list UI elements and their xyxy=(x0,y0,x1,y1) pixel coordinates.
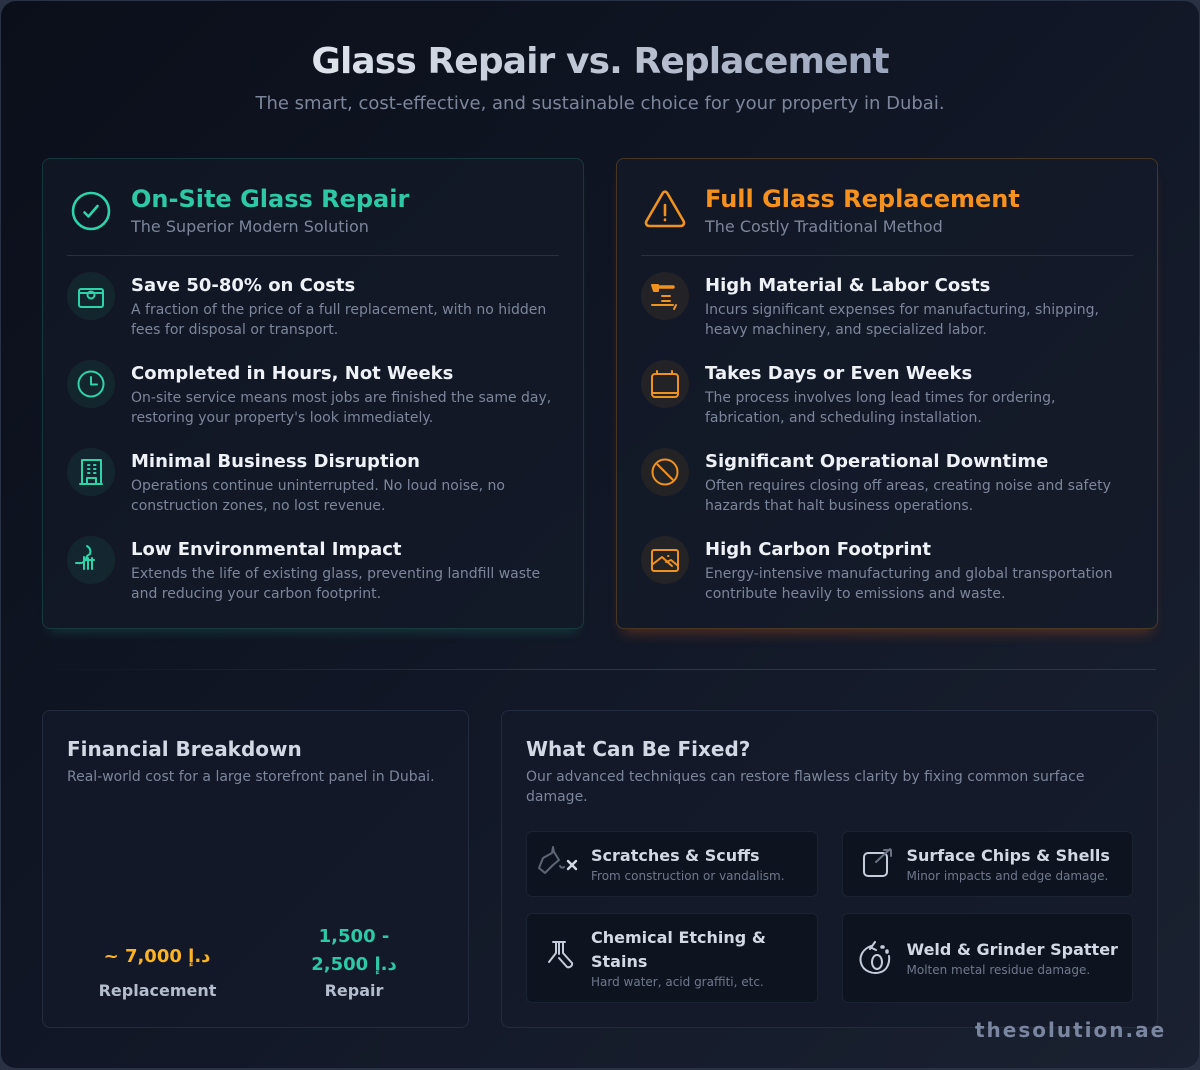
description: Minor impacts and edge damage. xyxy=(906,869,1108,883)
panel: financial breakdown xyxy=(42,710,469,1028)
description: damage. xyxy=(526,789,588,805)
card: scratches xyxy=(526,831,818,897)
description: Molten metal residue damage. xyxy=(906,963,1090,977)
description: Our advanced techniques can restore flawless clarity by fixing common surface xyxy=(526,769,1084,785)
item: save costs xyxy=(67,272,546,338)
icon: landscape image xyxy=(641,536,689,584)
item description: Operations continue uninterrupted. No loud noise, no xyxy=(131,478,505,494)
item description: On-site service means most jobs are finished the same day, xyxy=(131,390,551,406)
panel: full glass replacement xyxy=(616,158,1158,629)
subheading: The Costly Traditional Method xyxy=(705,217,943,236)
subheading: The Superior Modern Solution xyxy=(131,217,369,236)
title: Surface Chips & Shells xyxy=(906,846,1110,865)
title xyxy=(591,928,766,971)
item title: Completed in Hours, Not Weeks xyxy=(131,363,453,384)
item description: Incurs significant expenses for manufacturing, shipping, xyxy=(705,302,1099,318)
item title: Takes Days or Even Weeks xyxy=(705,363,972,384)
item description: fabrication, and scheduling installation. xyxy=(705,410,982,426)
item: downtime xyxy=(641,448,1111,514)
item description xyxy=(131,478,505,514)
item description: and reducing your carbon footprint. xyxy=(131,586,381,602)
item description xyxy=(705,478,1111,514)
item: minimal disruption xyxy=(67,448,505,514)
item description: Extends the life of existing glass, preventing landfill waste xyxy=(131,566,540,582)
item description: A fraction of the price of a full replacement, with no hidden xyxy=(131,302,546,318)
item title: Save 50-80% on Costs xyxy=(131,275,355,296)
title: Weld & Grinder Spatter xyxy=(906,940,1118,959)
item title: Low Environmental Impact xyxy=(131,539,402,560)
card: weld spatter xyxy=(842,913,1133,1003)
item title: Minimal Business Disruption xyxy=(131,451,420,472)
item description: contribute heavily to emissions and waste. xyxy=(705,586,1005,602)
value: repair: 1,500 - xyxy=(319,926,389,947)
icon: building xyxy=(67,448,115,496)
icon: scratches xyxy=(538,846,578,874)
value: repair xyxy=(311,926,397,975)
title: Glass Repair vs. Replacement xyxy=(311,41,889,82)
icon: prohibited xyxy=(641,448,689,496)
item title: Significant Operational Downtime xyxy=(705,451,1048,472)
item description: The process involves long lead times for ordering, xyxy=(705,390,1055,406)
item description xyxy=(131,302,546,338)
item description: fees for disposal or transport. xyxy=(131,322,338,338)
item description xyxy=(131,390,551,426)
card: chips xyxy=(842,831,1133,897)
item title: High Material & Labor Costs xyxy=(705,275,990,296)
item description xyxy=(705,566,1112,602)
icon: chipped square xyxy=(863,848,892,877)
item description xyxy=(131,566,540,602)
value: replacement: ~ 7,000 د.إ xyxy=(104,946,210,967)
heading: What Can Be Fixed? xyxy=(526,737,750,761)
icon: check circle xyxy=(72,192,110,230)
item: material and labor xyxy=(641,272,1099,338)
icon: spatter xyxy=(859,941,890,974)
title: Chemical Etching & xyxy=(591,928,766,947)
item description: hazards that halt business operations. xyxy=(705,498,973,514)
label: repair: Repair xyxy=(325,981,383,1000)
brand watermark: thesolution.ae xyxy=(975,1018,1166,1042)
icon: crane xyxy=(641,272,689,320)
value: repair: 2,500 د.إ xyxy=(311,954,397,975)
subtitle: The smart, cost-effective, and sustainable choice for your property in Dubai. xyxy=(255,93,945,114)
panel: what can be fixed xyxy=(501,710,1158,1028)
item description xyxy=(704,390,1055,426)
icon: cash xyxy=(67,272,115,320)
heading: on-site glass repair: On-Site Glass Repair xyxy=(131,184,409,212)
item description: Often requires closing off areas, creating noise and safety xyxy=(705,478,1111,494)
item title: High Carbon Footprint xyxy=(705,539,931,560)
icon: calendar xyxy=(641,360,689,408)
icon: warning triangle xyxy=(644,190,686,228)
item description: construction zones, no lost revenue. xyxy=(131,498,385,514)
panel: on-site glass repair xyxy=(42,158,584,629)
description xyxy=(526,769,1084,805)
item description: restoring your property's look immediately. xyxy=(131,410,433,426)
title: Stains xyxy=(591,952,647,971)
description: Real-world cost for a large storefront panel in Dubai. xyxy=(67,769,435,785)
heading: full glass replacement: Full Glass Replacement xyxy=(705,184,1020,212)
title: Scratches & Scuffs xyxy=(591,846,760,865)
icon: plant xyxy=(67,536,115,584)
item: environmental impact xyxy=(67,536,540,602)
label: replacement: Replacement xyxy=(99,981,216,1000)
item description xyxy=(705,302,1099,338)
item description: heavy machinery, and specialized labor. xyxy=(705,322,987,338)
item: carbon footprint xyxy=(641,536,1112,602)
icon: flask xyxy=(548,941,574,968)
item description: Energy-intensive manufacturing and global transportation xyxy=(705,566,1112,582)
item: hours not weeks xyxy=(67,360,551,426)
item: days or weeks xyxy=(641,360,1055,426)
description: From construction or vandalism. xyxy=(591,869,785,883)
heading: Financial Breakdown xyxy=(67,737,302,761)
card: chemical etching xyxy=(526,913,818,1003)
description: Hard water, acid graffiti, etc. xyxy=(591,975,764,989)
icon: clock xyxy=(67,360,115,408)
